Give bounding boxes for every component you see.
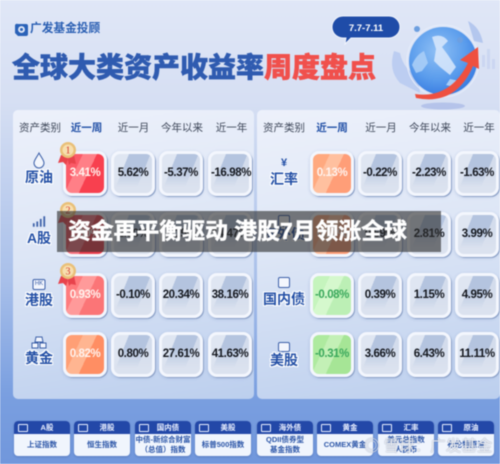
row: 港股: 港股 (25, 292, 53, 308)
headline banner (57, 211, 441, 252)
index tab: 国内债: 中债-新综合财富 (136, 435, 190, 444)
left table header: 资产类别 (19, 122, 61, 134)
row: 国内债 (262, 273, 500, 320)
index tab: 海外债 (257, 421, 313, 456)
right table header: 今年以来 (409, 122, 451, 134)
row: A股: A股 (27, 230, 51, 246)
row: A股: 14.47% (212, 228, 248, 240)
left table header: 近一周 (71, 122, 102, 134)
right table header: 近一月 (365, 122, 397, 134)
row: 黄金: 0.80% (118, 348, 148, 360)
row: A股: 3.15% (166, 228, 196, 240)
row: 汇率: ¥ (281, 157, 287, 169)
row: 黄金: 41.63% (212, 348, 248, 360)
row: 海外债: 2.81% (414, 228, 444, 240)
index tab: 美股: 标普500指数 (202, 440, 244, 449)
row: 海外债 (263, 212, 500, 260)
headline banner: 资金再平衡驱动 港股7月领涨全球 (68, 218, 407, 244)
index tab: 海外债: 海外债 (279, 423, 301, 432)
row: 美股: 美股 (270, 352, 298, 368)
row: 港股: HK (35, 281, 43, 287)
row: 海外债: 0.59% (365, 228, 395, 240)
right table header: 资产类别 (263, 122, 305, 134)
row: 汇率 (270, 152, 500, 198)
index tab: 原油: 原油 (464, 423, 478, 432)
index tab: 国内债: 国内债 (157, 423, 179, 432)
row: 美股: 3.66% (365, 348, 395, 360)
panel: right asset table (257, 110, 500, 399)
row: 港股: 20.34% (163, 289, 199, 301)
icon: globe with rising arrow (392, 21, 495, 110)
row: 海外债: 3.99% (462, 228, 492, 240)
index tab: A股 (14, 421, 70, 456)
row: 黄金: 0.82% (70, 348, 100, 360)
row: 港股: 38.16% (212, 289, 248, 301)
date bubble (332, 16, 400, 44)
logo: 广发基金投顾: 广发基金投顾 (30, 22, 100, 35)
index tab: 海外债: 基金指数 (270, 445, 300, 454)
row: 汇率: -2.23% (412, 167, 446, 179)
row: 原油: 3.41% (70, 167, 100, 179)
icon: rank 2 medal (58, 201, 77, 225)
row: A股: 1.30% (70, 228, 100, 240)
row: 汇率: 0.13% (317, 167, 347, 179)
row: 国内债: 国内债 (263, 291, 305, 307)
row: 汇率: 汇率 (270, 171, 298, 187)
index tab: 汇率: 人民币 (395, 445, 417, 454)
index tab: 海外债: QDII债券型 (266, 435, 304, 444)
row: 港股 (24, 273, 254, 320)
row: 原油: 5.62% (118, 167, 148, 179)
index tab: 国内债: （总值）指数 (140, 445, 186, 454)
row: 国内债: -0.08% (315, 289, 349, 301)
row: 原油: -16.98% (211, 167, 251, 179)
row: 美股: -0.31% (315, 348, 349, 360)
row: 国内债: 0.39% (365, 289, 395, 301)
index tab: 美股 (195, 421, 251, 456)
index tab: 港股: 恒生指数 (87, 440, 117, 449)
left table header: 近一月 (118, 122, 149, 134)
row: A股: 2.30% (118, 228, 148, 240)
row: 汇率: -1.63% (460, 167, 494, 179)
row: 原油: -5.37% (164, 167, 198, 179)
row: 美股: 6.43% (414, 348, 444, 360)
icon: rank 2 medal: 2 (66, 206, 70, 216)
right table header (263, 122, 495, 134)
index tab: 汇率: 美元总指数 (387, 435, 425, 444)
row: 原油: 原油 (25, 169, 53, 185)
row: 美股 (269, 332, 500, 380)
index tab: A股: 上证指数 (27, 440, 57, 449)
index tab: 黄金: 黄金 (342, 423, 358, 432)
row: 港股: -0.10% (116, 289, 150, 301)
left table header: 今年以来 (161, 122, 203, 134)
row: 国内债: 4.95% (462, 289, 492, 301)
left table header: 近一年 (216, 122, 247, 134)
row: 海外债: 0.10% (317, 228, 347, 240)
watermark: ◎ 雪球：广发基金 (364, 438, 492, 455)
index tab: A股: A股 (41, 423, 53, 432)
row: 黄金 (24, 332, 254, 380)
date bubble: 7.7-7.11 (349, 23, 384, 34)
logo: 广发基金投顾 (14, 20, 100, 37)
icon: rank 3 medal: 3 (66, 266, 70, 278)
right table header: 近一年 (463, 122, 495, 134)
index tab: 原油 (438, 421, 494, 456)
icon: rank 1 medal (58, 141, 77, 166)
right table header: 近一周 (316, 122, 348, 134)
index tab: 国内债 (135, 421, 191, 456)
index tab: 黄金: COMEX黄金 (324, 440, 366, 449)
icon: rank 3 medal (58, 262, 77, 286)
index tab: 汇率: 汇率 (404, 423, 418, 432)
icon: rank 1 medal: 1 (66, 146, 70, 156)
index tab: 港股: 港股 (100, 423, 114, 432)
index tab: 原油: 布伦特原油 (447, 440, 485, 449)
row: 美股: 11.11% (459, 348, 495, 360)
index tab: 港股 (74, 421, 130, 456)
index tab: 汇率 (378, 421, 434, 456)
index tab: 黄金 (317, 421, 373, 456)
panel: left asset table (13, 110, 254, 399)
left table header (19, 122, 248, 134)
title: 全球大类资产收益率周度盘点 (12, 52, 376, 83)
row: 港股: 0.93% (70, 289, 100, 301)
row: 黄金: 黄金 (25, 350, 53, 366)
row: 海外债: 海外债 (263, 226, 305, 242)
row: 黄金: 27.61% (163, 348, 199, 360)
row: 国内债: 1.15% (414, 289, 444, 301)
row: A股 (26, 213, 254, 260)
row: 汇率: -0.22% (363, 167, 397, 179)
row: 原油 (24, 152, 254, 198)
index tab: 美股: 美股 (220, 423, 236, 432)
